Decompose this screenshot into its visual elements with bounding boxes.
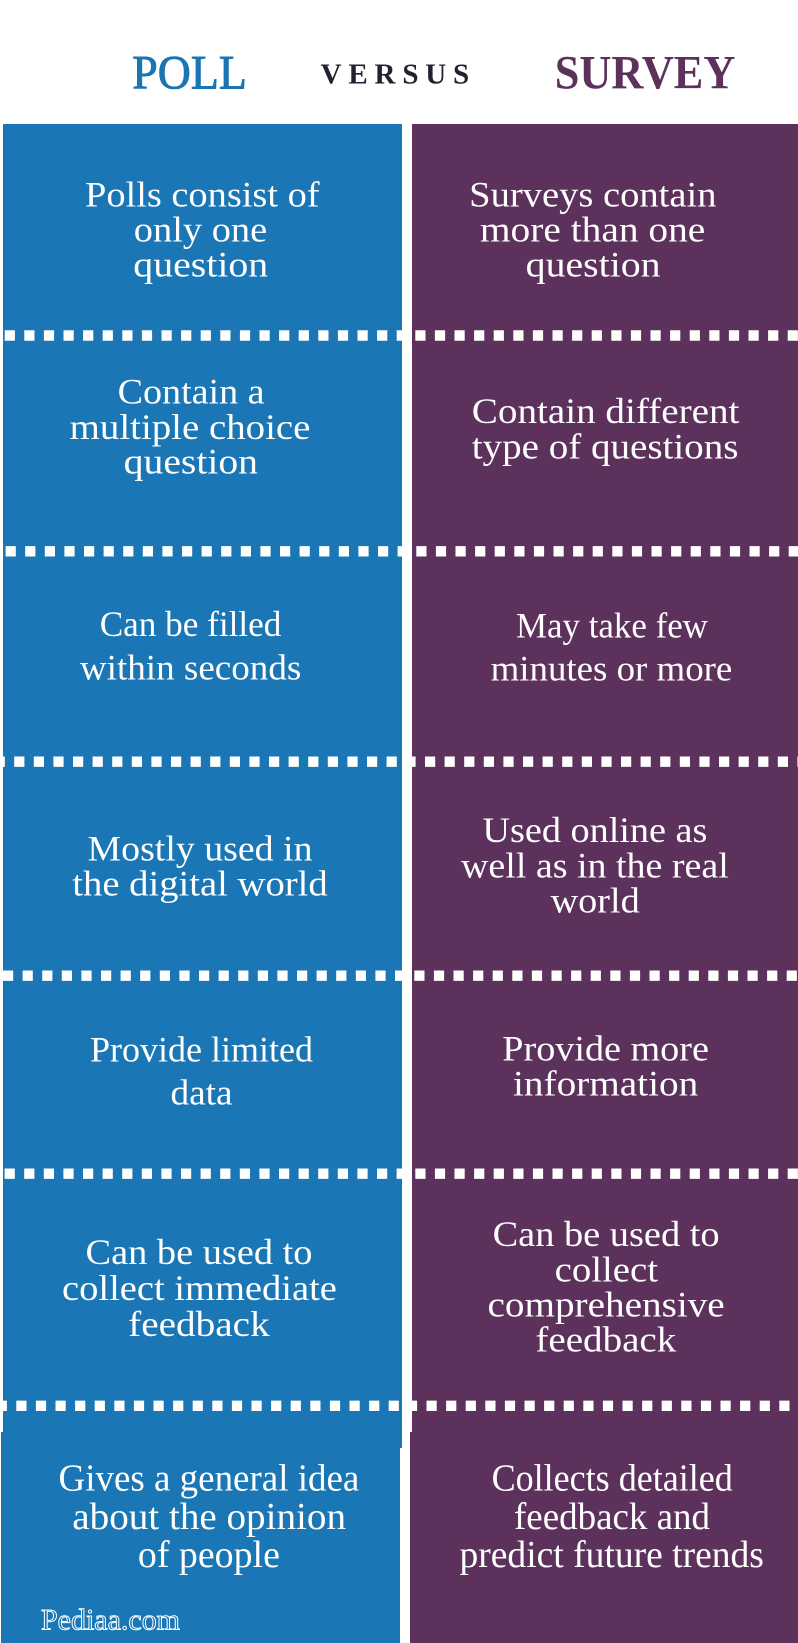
text: poll row 1 xyxy=(85,175,320,285)
text: poll row 7 xyxy=(58,1458,359,1576)
text: survey row 1: more than one xyxy=(480,210,705,250)
text: survey row 3: May take few xyxy=(516,606,708,646)
text: survey row 2: Contain different xyxy=(472,391,739,431)
text: poll row 7: Gives a general idea xyxy=(58,1458,359,1500)
text: survey row 1: Surveys contain xyxy=(469,175,716,215)
text: poll row 4 xyxy=(72,828,328,903)
text: poll row 1: Polls consist of xyxy=(85,175,320,215)
text: survey row 3: minutes or more xyxy=(491,648,732,688)
text: survey row 5 xyxy=(502,1028,709,1103)
text: poll row 5: Provide limited xyxy=(90,1030,313,1070)
text: survey row 7 xyxy=(460,1458,764,1576)
heading: survey: SURVEY xyxy=(555,46,735,99)
text: survey row 6: collect xyxy=(555,1250,658,1290)
text: poll row 3: within seconds xyxy=(80,647,301,687)
panel: poll column background xyxy=(1,124,402,1643)
panel: survey column background xyxy=(410,124,798,1643)
text: poll row 5: data xyxy=(170,1072,233,1112)
text: poll row 2 xyxy=(70,372,310,482)
text: poll row 6: collect immediate xyxy=(62,1268,337,1308)
text: poll row 3 xyxy=(80,604,301,687)
text: poll row 1: question xyxy=(133,245,268,285)
text: survey row 6: feedback xyxy=(535,1319,676,1359)
text: survey row 2 xyxy=(472,391,739,466)
text: poll row 6 xyxy=(62,1232,337,1344)
text: poll row 4: Mostly used in xyxy=(88,828,312,868)
heading: poll: POLL xyxy=(132,46,247,99)
text: survey row 7: predict future trends xyxy=(460,1534,764,1576)
text: survey row 5: information xyxy=(513,1063,698,1103)
text: pediaa.com watermark: Pediaa.com xyxy=(41,1603,180,1636)
text: survey row 6: comprehensive xyxy=(488,1284,725,1324)
text: poll row 4: the digital world xyxy=(72,863,328,903)
text: survey row 6: Can be used to xyxy=(493,1214,720,1254)
text: poll row 2: multiple choice xyxy=(70,407,310,447)
text: survey row 4: well as in the real xyxy=(461,845,729,885)
text: survey row 2: type of questions xyxy=(472,426,738,466)
text: poll row 7: about the opinion xyxy=(72,1496,346,1538)
text: poll row 6: Can be used to xyxy=(86,1232,312,1272)
text: poll row 3: Can be filled xyxy=(100,604,281,644)
text: poll row 6: feedback xyxy=(128,1304,270,1344)
text: survey row 1: question xyxy=(526,245,661,285)
text: poll row 1: only one xyxy=(134,210,267,250)
text: poll row 5 xyxy=(90,1030,313,1112)
text: poll row 2: question xyxy=(124,442,258,482)
text: survey row 7: feedback and xyxy=(514,1496,710,1538)
text: poll row 7: of people xyxy=(138,1534,280,1576)
text: survey row 4: world xyxy=(551,880,640,920)
text: survey row 4: Used online as xyxy=(482,810,707,850)
text: survey row 4 xyxy=(461,810,729,920)
text: survey row 7: Collects detailed xyxy=(492,1458,733,1500)
title: poll versus survey header xyxy=(132,46,735,99)
text: survey row 1 xyxy=(469,175,716,285)
text: survey row 5: Provide more xyxy=(502,1028,709,1068)
text: survey row 6 xyxy=(488,1214,725,1359)
text: poll row 2: Contain a xyxy=(118,372,265,412)
text: survey row 3 xyxy=(491,606,732,688)
heading: versus: VERSUS xyxy=(321,59,469,91)
